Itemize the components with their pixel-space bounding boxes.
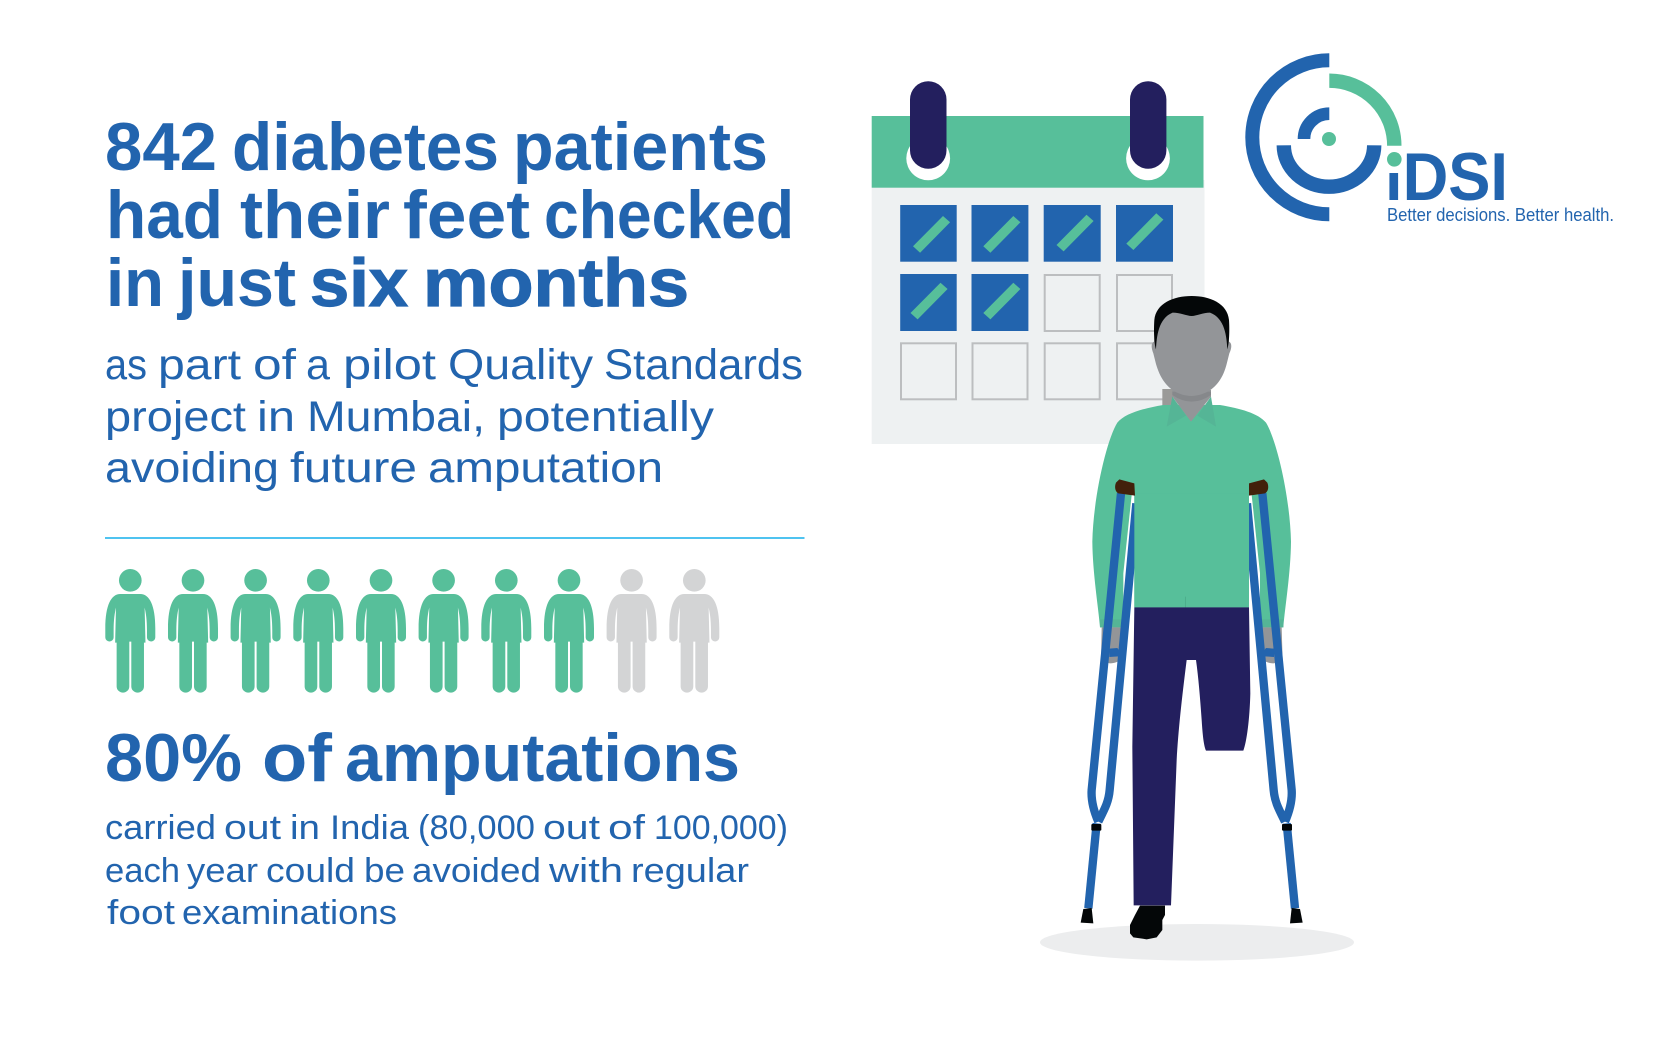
subheading: pilot project description: of [253,341,297,389]
logo wordmark: iDSI [1385,139,1508,215]
ground shadow [1040,924,1354,961]
shirt [1092,405,1291,627]
body text: amputation statistic: in [290,809,320,847]
heading: 80% of amputations: of [262,720,332,796]
body text: amputation statistic: of [608,809,646,847]
crutch grips [1115,479,1268,496]
logo mark [1252,60,1394,214]
logo tagline: Better decisions. Better health. [1387,204,1614,225]
title: 842 diabetes patients headline: months [423,245,689,321]
head [1152,296,1231,396]
title: 842 diabetes patients headline: 842 [105,109,217,185]
title: 842 diabetes patients headline: had [106,177,223,253]
subheading: pilot project description: in [257,393,295,441]
neck and collar [1167,390,1216,427]
heading: 80% of amputations: amputations [345,720,740,796]
illustration: man on crutches with amputated leg [1040,296,1354,961]
body text: amputation statistic: with [548,852,623,890]
subheading: pilot project description: as [105,341,147,389]
title: 842 diabetes patients headline: feet [403,177,530,253]
calendar rings [906,81,1170,180]
body text: amputation statistic: year [187,852,258,890]
body text: amputation statistic: out [224,809,282,847]
subheading: pilot project description: future [290,444,417,492]
heading: 80% of amputations: 80% [105,720,242,796]
logo: iDSI [1252,60,1614,225]
subheading: pilot project description: avoiding [105,444,279,492]
subheading: pilot project description: amputation [428,444,663,492]
subheading: pilot project description: pilot [343,341,436,389]
heading: 80% of amputations [105,720,740,796]
subheading: pilot project description: a [306,341,330,389]
pictogram: 8 of 10 people highlighted [105,569,719,693]
body text: amputation statistic: India [330,809,409,847]
body text: amputation statistic: could [266,852,355,890]
body text: amputation statistic: 100,000) [654,809,788,847]
crutches [1081,493,1303,923]
title: 842 diabetes patients headline: six [310,245,408,321]
body text: amputation statistic: examinations [182,894,397,932]
shoe [1130,906,1165,939]
subheading: pilot project description: potentially [497,393,715,441]
title: 842 diabetes patients headline: just [176,245,296,321]
hands [1101,627,1283,663]
body text: amputation statistic: avoided [412,852,541,890]
body text: amputation statistic: out [543,809,601,847]
icon: calendar with ticked days [872,81,1204,444]
title: 842 diabetes patients headline: in [106,245,164,321]
trousers [1132,607,1250,905]
body text: amputation statistic: foot [107,894,176,932]
body text: amputation statistic: (80,000 [418,809,535,847]
body text: amputation statistic: each [105,852,180,890]
subheading: pilot project description: Mumbai, [307,393,485,441]
body text: amputation statistic: regular [631,852,749,890]
body text: amputation statistic [105,809,788,932]
title: 842 diabetes patients headline: patients [513,109,768,185]
subheading: pilot project description: Quality [448,341,594,389]
body text: amputation statistic: be [364,852,405,890]
completed day cells [900,205,1173,331]
title: 842 diabetes patients headline: their [240,177,390,253]
title: 842 diabetes patients headline: diabetes [232,109,499,185]
title: 842 diabetes patients headline: checked [544,177,794,253]
subheading: pilot project description [105,341,803,492]
title: 842 diabetes patients headline [105,109,794,321]
body text: amputation statistic: carried [105,809,216,847]
subheading: pilot project description: project [105,393,246,441]
empty day cells [901,275,1172,399]
subheading: pilot project description: Standards [604,341,803,389]
calendar header [872,116,1204,188]
subheading: pilot project description: part [158,341,241,389]
